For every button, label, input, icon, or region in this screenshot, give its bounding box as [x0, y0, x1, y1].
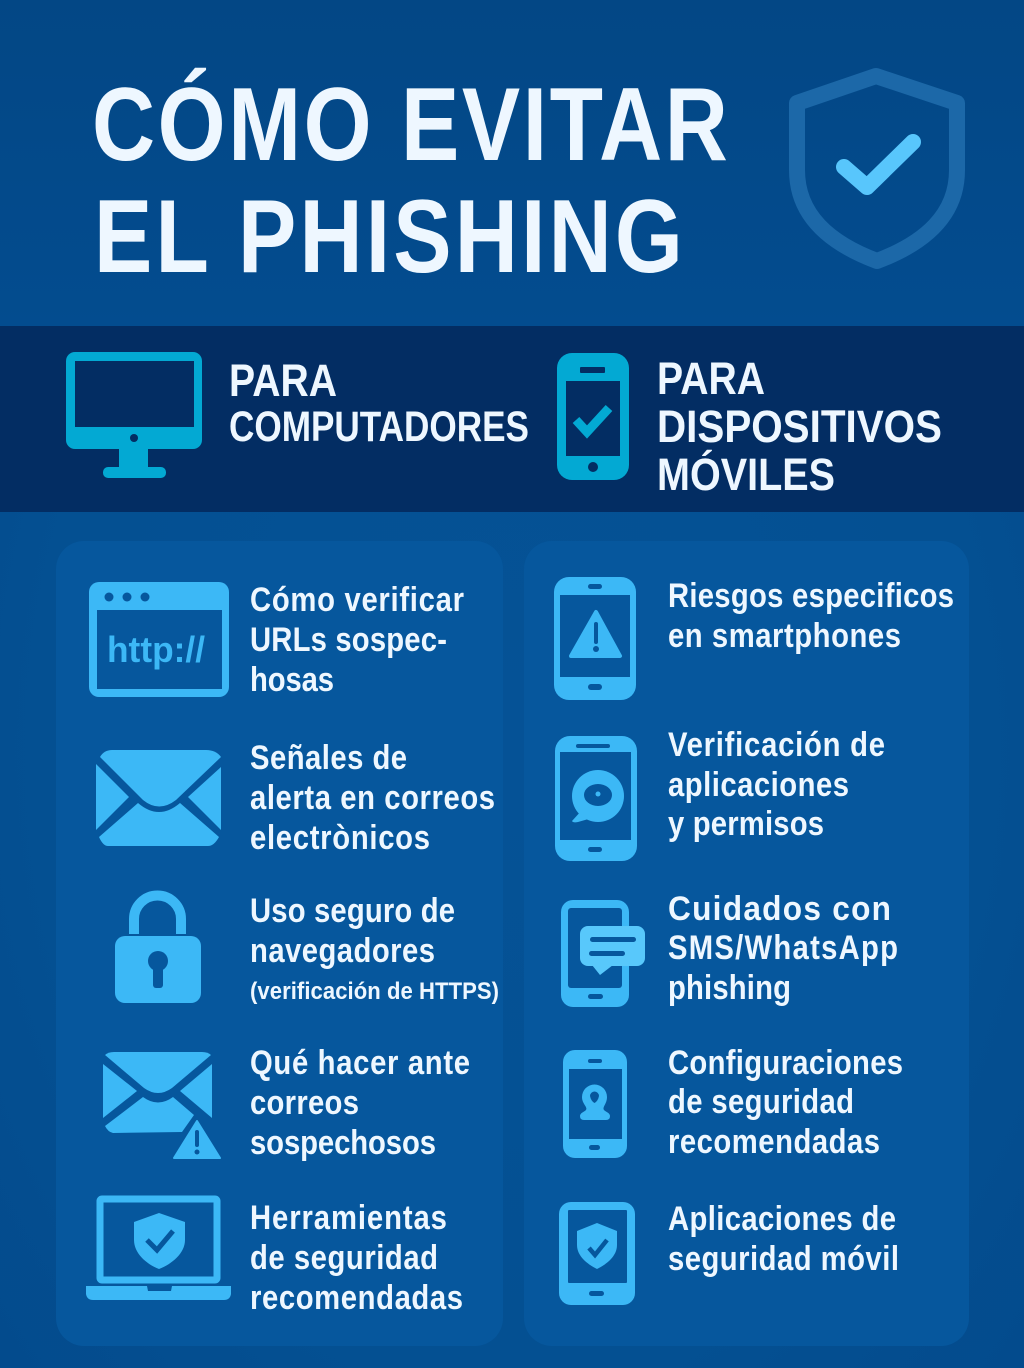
text: configuraciones: de seguridad — [668, 1082, 854, 1121]
category band — [0, 326, 1024, 512]
icon: envelope with warning — [103, 1052, 220, 1158]
text: riesgos — [668, 576, 954, 655]
text: herramientas — [250, 1198, 463, 1317]
icon: envelope — [96, 750, 221, 846]
icon: browser window http: http:// — [107, 629, 205, 670]
text: verificacion de aplicaciones — [668, 725, 885, 843]
text: aplicaciones de seguridad — [668, 1199, 899, 1278]
icon: phone with message — [561, 900, 645, 1007]
text: navegadores — [250, 891, 499, 1004]
panel: mobile devices — [524, 541, 969, 1346]
text: correos sospechosos: correos — [250, 1083, 359, 1122]
text: aplicaciones de seguridad: seguridad móvil — [668, 1239, 899, 1278]
text: senales de alerta — [250, 738, 495, 857]
text: sms whatsapp: phishing — [668, 968, 791, 1007]
text: verificacion de aplicaciones: aplicaciones — [668, 765, 849, 804]
heading: para computadores: COMPUTADORES — [229, 403, 529, 451]
title: EL PHISHING — [94, 179, 683, 295]
text: senales de alerta: electrònicos — [250, 818, 430, 857]
text: verificar urls — [250, 580, 464, 699]
text: correos sospechosos: sospechosos — [250, 1123, 436, 1162]
icon: phone with chat bubble — [555, 736, 637, 861]
heading: para dispositivos moviles — [657, 353, 942, 500]
text: sms whatsapp — [668, 889, 898, 1007]
title — [92, 67, 728, 295]
text: aplicaciones de seguridad: Aplicaciones de — [668, 1199, 896, 1238]
text: configuraciones: recomendadas — [668, 1122, 880, 1161]
text: senales de alerta: alerta en correos — [250, 778, 495, 817]
text: navegadores: (verificación de HTTPS) — [250, 977, 499, 1004]
text: verificacion de aplicaciones: y permisos — [668, 804, 824, 843]
text: navegadores: navegadores — [250, 931, 435, 970]
text: verificacion de aplicaciones: Verificación de — [668, 725, 885, 764]
icon: phone with user lock — [563, 1050, 627, 1158]
icon: shield with check — [797, 76, 957, 261]
title: CÓMO EVITAR — [92, 67, 728, 183]
icon: laptop with shield — [86, 1199, 231, 1300]
text: sms whatsapp: SMS/WhatsApp — [668, 928, 898, 967]
icon: smartphone with check — [557, 353, 629, 480]
text: correos sospechosos: Qué hacer ante — [250, 1043, 470, 1082]
text: herramientas: Herramientas — [250, 1198, 447, 1237]
text: correos sospechosos — [250, 1043, 470, 1162]
text: herramientas: recomendadas — [250, 1278, 463, 1317]
heading: para dispositivos moviles: PARA — [657, 353, 765, 404]
text: navegadores: Uso seguro de — [250, 891, 455, 930]
text: riesgos: Riesgos especificos — [668, 576, 954, 615]
heading: para computadores: PARA — [229, 355, 337, 406]
icon: phone with warning — [554, 577, 636, 700]
icon: phone with shield — [559, 1202, 635, 1305]
text: senales de alerta: Señales de — [250, 738, 407, 777]
text: sms whatsapp: Cuidados con — [668, 889, 891, 927]
text: riesgos: en smartphones — [668, 616, 901, 655]
text: configuraciones: Configuraciones — [668, 1043, 903, 1082]
panel: computers — [56, 541, 503, 1346]
icon: padlock — [115, 895, 201, 1003]
icon: desktop monitor — [66, 352, 202, 478]
text: configuraciones — [668, 1043, 903, 1161]
text: verificar urls: URLs sospec- — [250, 620, 447, 659]
heading: para dispositivos moviles: DISPOSITIVOS — [657, 401, 942, 452]
heading: para computadores — [229, 355, 529, 451]
icon: browser window http — [89, 582, 229, 697]
text: herramientas: de seguridad — [250, 1238, 438, 1277]
text: verificar urls: hosas — [250, 660, 334, 699]
heading: para dispositivos moviles: MÓVILES — [657, 449, 835, 500]
text: verificar urls: Cómo verificar — [250, 580, 464, 619]
